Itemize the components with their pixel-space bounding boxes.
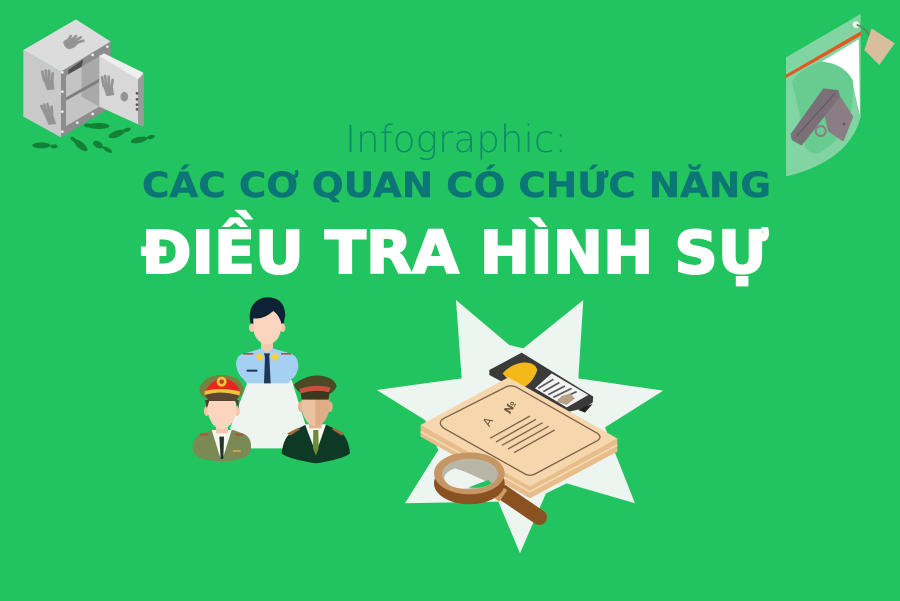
pale eight-point star bbox=[377, 300, 663, 553]
officer: dark green uniform bbox=[282, 376, 350, 463]
case file folder: A bbox=[480, 414, 496, 429]
officer: green uniform with red cap bbox=[193, 375, 251, 461]
title: điều tra hình sự: ĐIỀU TRA HÌNH SỰ bbox=[141, 210, 769, 287]
gun bbox=[791, 88, 853, 146]
title: các cơ quan có chức năng: CÁC CƠ QUAN CÓ CHỨC NĂNG bbox=[142, 165, 771, 206]
officer: blue uniform bbox=[236, 297, 298, 383]
case file folder bbox=[421, 377, 617, 498]
ID card with badge bbox=[489, 353, 593, 413]
case file folder: № bbox=[501, 398, 519, 416]
icon: star burst with case file, ID card and magnifier bbox=[377, 300, 663, 553]
footprints bbox=[32, 123, 155, 154]
title block bbox=[141, 118, 771, 287]
pale triangle background bbox=[230, 380, 307, 448]
magnifying glass bbox=[434, 452, 539, 517]
handprints bbox=[41, 36, 128, 125]
icon: three officers in uniform bbox=[193, 297, 350, 463]
icon: open safe with handprints and footprints bbox=[23, 19, 155, 154]
title: Infographic: Infographic: bbox=[345, 118, 567, 161]
icon: evidence bag with gun and tag bbox=[786, 14, 895, 176]
